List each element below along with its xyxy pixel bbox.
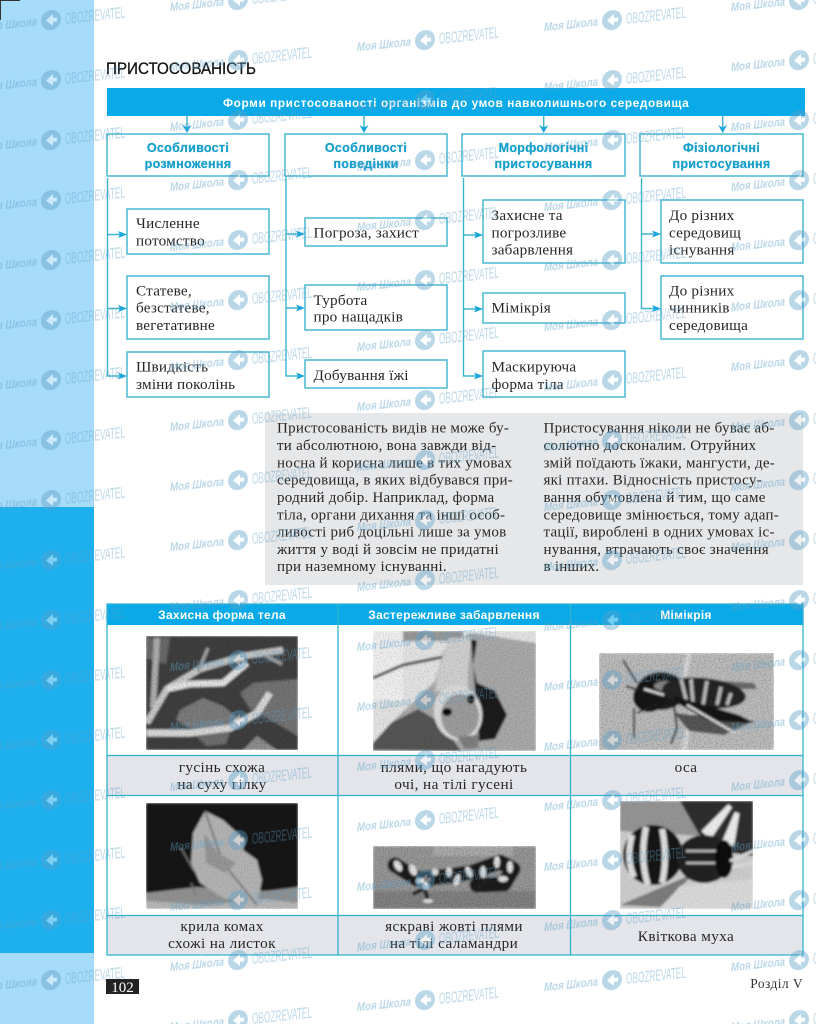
captions row 1: оса: [675, 759, 697, 776]
table header: Мімікрія: [660, 608, 712, 622]
box: reproduction types: Статеве,: [136, 283, 192, 300]
page number: 102: [111, 980, 134, 996]
captions row 1: очі, на тілі гусені: [394, 776, 514, 793]
paragraph: right: Пристосування ніколи не буває аб-: [544, 421, 775, 437]
paragraph: left: носна й корисна лише в тих умовах: [277, 455, 512, 471]
box: getting food: Добування їжі: [314, 367, 409, 384]
captions row 2: на тілі саламандри: [390, 935, 518, 952]
paragraph: right: змій поїдають їжаки, мангусти, де-: [544, 455, 775, 471]
arrows from banner: [182, 116, 727, 133]
box: care for offspring: про нащадків: [314, 309, 403, 326]
paragraph: left: життя у воді й зовсім не придатні: [276, 542, 499, 558]
box: reproduction types: вегетативне: [136, 317, 215, 334]
paragraph: left: родний добір. Наприклад, форма: [277, 490, 495, 506]
captions row 2: Квіткова муха: [638, 928, 734, 945]
heading: morphological: [462, 134, 625, 176]
box: numerous offspring: потомство: [136, 233, 205, 250]
column 2: behaviour: [285, 134, 447, 388]
box: getting food: [305, 360, 447, 388]
captions row 1: [177, 759, 697, 793]
captions row 2: [168, 918, 734, 952]
box: numerous offspring: [127, 209, 269, 254]
box: different factors: чинників: [669, 300, 730, 317]
heading: physiological: пристосування: [673, 157, 770, 171]
box: generation speed: зміни поколінь: [136, 376, 235, 393]
connectors column 3: [464, 178, 483, 380]
section label: Розділ V: [750, 976, 803, 991]
heading: physiological: Фізіологічні: [683, 141, 760, 155]
box: generation speed: Швидкість: [136, 359, 208, 376]
photo: wasp: [599, 653, 774, 750]
heading: behaviour: Особливості: [325, 141, 407, 155]
table header: [107, 604, 803, 625]
heading: behaviour: поведінки: [333, 157, 399, 171]
heading: physiological: [640, 134, 803, 176]
text panel: [265, 413, 803, 585]
box: mimicry: [483, 293, 625, 323]
heading: reproduction: [107, 134, 269, 176]
box: different factors: середовища: [669, 317, 748, 334]
paragraph: right: в інших.: [544, 559, 599, 575]
heading: morphological: Морфологічні: [499, 141, 588, 155]
paragraph: left: ливості риб доцільні лише за умов: [277, 525, 506, 541]
box: threat, defence: Погроза, захист: [314, 224, 419, 241]
table header: Застережливе забарвлення: [368, 608, 540, 622]
box: reproduction types: [127, 276, 269, 339]
captions row 1: на суху гілку: [177, 776, 267, 793]
table: [107, 604, 803, 955]
page number: [106, 979, 139, 996]
connectors column 2: [286, 176, 305, 380]
diagram banner: Форми пристосованості організмів до умов навколишнього середовища: [223, 96, 689, 110]
paragraph: right: середовище змінюється, тому адап-: [544, 507, 779, 523]
box: reproduction types: безстатеве,: [136, 300, 210, 317]
captions row 1: плями, що нагадують: [381, 759, 527, 776]
box: generation speed: [127, 352, 269, 397]
captions row 2: схожі на листок: [168, 935, 276, 952]
box: different habitats: існування: [669, 241, 735, 258]
photo: caterpillar with eye spots: [373, 631, 536, 751]
box: care for offspring: [305, 285, 447, 330]
box: care for offspring: Турбота: [314, 292, 367, 309]
paragraph: left: тіла, органи дихання та інші особ-: [277, 507, 505, 523]
paragraph: left: при наземному існуванні.: [277, 559, 447, 575]
heading: reproduction: розмноження: [145, 157, 231, 171]
box: different habitats: До різних: [669, 207, 735, 224]
paragraph: right: тації, вироблені в одних умовах іс-: [544, 525, 775, 541]
column 1: reproduction: [107, 134, 269, 397]
table header: Захисна форма тела: [158, 608, 286, 622]
heading: morphological: пристосування: [495, 157, 592, 171]
connectors column 4: [642, 178, 661, 312]
photo: salamander: [373, 846, 536, 909]
box: numerous offspring: Численне: [136, 215, 200, 232]
box: warning colouring: погрозливе: [492, 224, 566, 241]
paragraph: left: ти абсолютною, вона завжди від-: [277, 438, 496, 454]
photo: leaf butterfly: [146, 803, 298, 909]
title: ПРИСТОСОВАНІСТЬ: [106, 59, 256, 78]
paragraph: right: [544, 421, 779, 575]
box: masking form: [483, 351, 625, 397]
box: different habitats: середовищ: [669, 224, 741, 241]
box: masking form: Маскируюча: [492, 359, 576, 376]
captions row 2: крила комах: [180, 918, 264, 935]
box: warning colouring: забарвлення: [492, 241, 573, 258]
captions row 2: яскраві жовті плями: [385, 918, 523, 935]
box: threat, defence: [305, 218, 447, 246]
paragraph: right: вання обумовлена й тим, що саме: [544, 490, 766, 506]
box: different factors: До різних: [669, 283, 735, 300]
box: different factors: [661, 276, 803, 339]
diagram banner: [107, 88, 805, 116]
paragraph: left: середовища, в яких відбувався при-: [277, 473, 513, 489]
box: warning colouring: Захисне та: [492, 207, 563, 224]
captions row 1: гусінь схожа: [179, 759, 265, 776]
paragraph: right: які птахи. Відносність пристосу-: [544, 473, 762, 489]
column 4: physiological: [640, 134, 803, 339]
column 3: morphological: [462, 134, 625, 397]
left sidebar: [0, 0, 94, 1024]
table grid: [107, 604, 803, 955]
photo: caterpillar on twig: [146, 636, 298, 750]
paragraph: right: солютно досконалим. Отруйних: [544, 438, 757, 454]
box: masking form: форма тіла: [492, 376, 564, 393]
box: warning colouring: [483, 200, 625, 263]
box: different habitats: [661, 200, 803, 263]
photo: hoverfly: [620, 801, 753, 909]
heading: reproduction: Особливості: [147, 141, 229, 155]
heading: behaviour: [285, 134, 447, 176]
connectors column 1: [108, 178, 127, 380]
paragraph: left: [276, 421, 513, 575]
box: mimicry: Мімікрія: [492, 300, 551, 317]
paragraph: left: Пристосованість видів не може бу-: [277, 421, 509, 437]
paragraph: right: нування, втрачають своє значення: [544, 542, 769, 558]
